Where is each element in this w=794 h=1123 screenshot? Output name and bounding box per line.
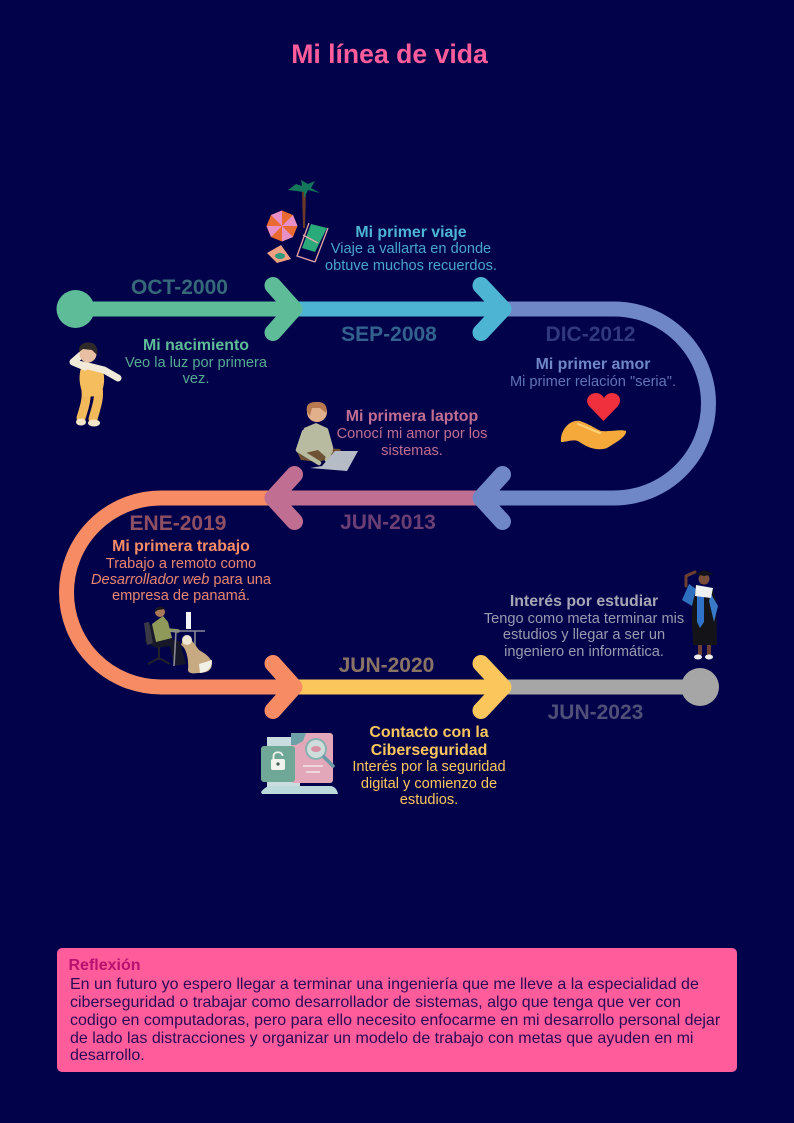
segment: pink arrow bbox=[272, 474, 478, 522]
icon: cybersecurity computer bbox=[261, 733, 338, 794]
reflection body: ciberseguridad o trabajar como desarrollador de sistemas, algo que tenga que ver con bbox=[70, 994, 681, 1011]
event: Mi primera laptop bbox=[337, 408, 487, 459]
event: Mi primer viaje: Viaje a vallarta en donde bbox=[331, 241, 491, 257]
event: Mi nacimiento: vez. bbox=[183, 371, 209, 387]
icon: boy with laptop bbox=[297, 402, 358, 471]
event: Mi primer viaje: obtuve muchos recuerdos. bbox=[325, 258, 497, 274]
event: Contacto con la Ciberseguridad bbox=[352, 724, 506, 808]
event: Interés por estudiar: Interés por estudiar bbox=[510, 593, 658, 610]
event: Mi primera laptop: sistemas. bbox=[381, 443, 443, 459]
event: Contacto con la Ciberseguridad: Interés por la seguridad bbox=[352, 759, 506, 775]
event: Mi primer amor: Mi primer relación "seria". bbox=[510, 374, 676, 390]
date: JUN-2023: JUN-2023 bbox=[548, 701, 643, 724]
event: Interés por estudiar: ingeniero en informática. bbox=[504, 644, 664, 660]
reflection body: de lado las distracciones y organizar un modelo de trabajo con metas que ayuden en mi bbox=[70, 1030, 693, 1047]
event: Contacto con la Ciberseguridad: estudios. bbox=[400, 792, 458, 808]
reflection body: desarrollo. bbox=[70, 1047, 145, 1064]
reflection heading: Reflexión bbox=[68, 957, 141, 974]
icon: heart and hand bbox=[561, 393, 626, 449]
event: Contacto con la Ciberseguridad: Contacto con la bbox=[369, 724, 489, 741]
reflection body: En un futuro yo espero llegar a terminar una ingeniería que me lleve a la especialidad de bbox=[70, 976, 699, 993]
event: Contacto con la Ciberseguridad: Ciberseguridad bbox=[371, 742, 487, 759]
segment: yellow arrow bbox=[298, 664, 503, 710]
panel: reflection bbox=[57, 948, 737, 1072]
date: OCT-2000: OCT-2000 bbox=[131, 276, 228, 299]
event: Interés por estudiar bbox=[484, 593, 684, 660]
segment: orange curve arrow bbox=[66, 498, 295, 710]
date: SEP-2008: SEP-2008 bbox=[341, 323, 437, 346]
event: Mi primera laptop: Mi primera laptop bbox=[346, 408, 479, 425]
icon: worker with dog bbox=[144, 607, 212, 673]
title: Mi línea de vida bbox=[291, 39, 488, 69]
icon: beach scene bbox=[266, 180, 328, 263]
event: Mi primera trabajo bbox=[91, 538, 272, 604]
date: JUN-2013: JUN-2013 bbox=[340, 511, 436, 534]
segment: gray end bbox=[505, 668, 719, 706]
icon: graduate bbox=[682, 570, 718, 660]
event: Mi primera trabajo: Mi primera trabajo bbox=[112, 538, 250, 555]
event: Interés por estudiar: estudios y llegar a ser un bbox=[503, 627, 665, 643]
event: Mi primera trabajo: empresa de panamá. bbox=[112, 588, 250, 604]
event: Mi primera laptop: Conocí mi amor por los bbox=[337, 426, 487, 442]
timeline path bbox=[56, 286, 719, 710]
segment: green start arrow bbox=[56, 286, 295, 332]
event: Mi nacimiento: Mi nacimiento bbox=[143, 337, 249, 354]
segment: blue arrow bbox=[295, 286, 505, 332]
event: Mi primer amor: Mi primer amor bbox=[536, 356, 650, 373]
date: JUN-2020: JUN-2020 bbox=[339, 654, 434, 677]
segment: periwinkle curve arrow bbox=[480, 309, 708, 522]
event: Mi primer viaje bbox=[325, 224, 497, 274]
reflection body: codigo en computadoras, pero para ello necesito enfocarme en mi desarrollo personal dejar bbox=[70, 1012, 721, 1029]
event: Contacto con la Ciberseguridad: digital y comienzo de bbox=[361, 776, 497, 792]
reflection body bbox=[70, 976, 721, 1064]
date: DIC-2012: DIC-2012 bbox=[546, 323, 635, 346]
event: Mi primera trabajo: Desarrollador web para una bbox=[91, 572, 272, 588]
event: Mi primera trabajo: Trabajo a remoto como bbox=[106, 556, 256, 572]
date: ENE-2019: ENE-2019 bbox=[130, 512, 226, 535]
event: Interés por estudiar: Tengo como meta terminar mis bbox=[484, 611, 684, 627]
icon: child in yellow overalls bbox=[73, 342, 118, 426]
event: Mi primer viaje: Mi primer viaje bbox=[355, 224, 467, 241]
event: Mi nacimiento: Veo la luz por primera bbox=[125, 355, 268, 371]
event: Mi nacimiento bbox=[125, 337, 268, 387]
event: Mi primer amor bbox=[510, 356, 676, 390]
